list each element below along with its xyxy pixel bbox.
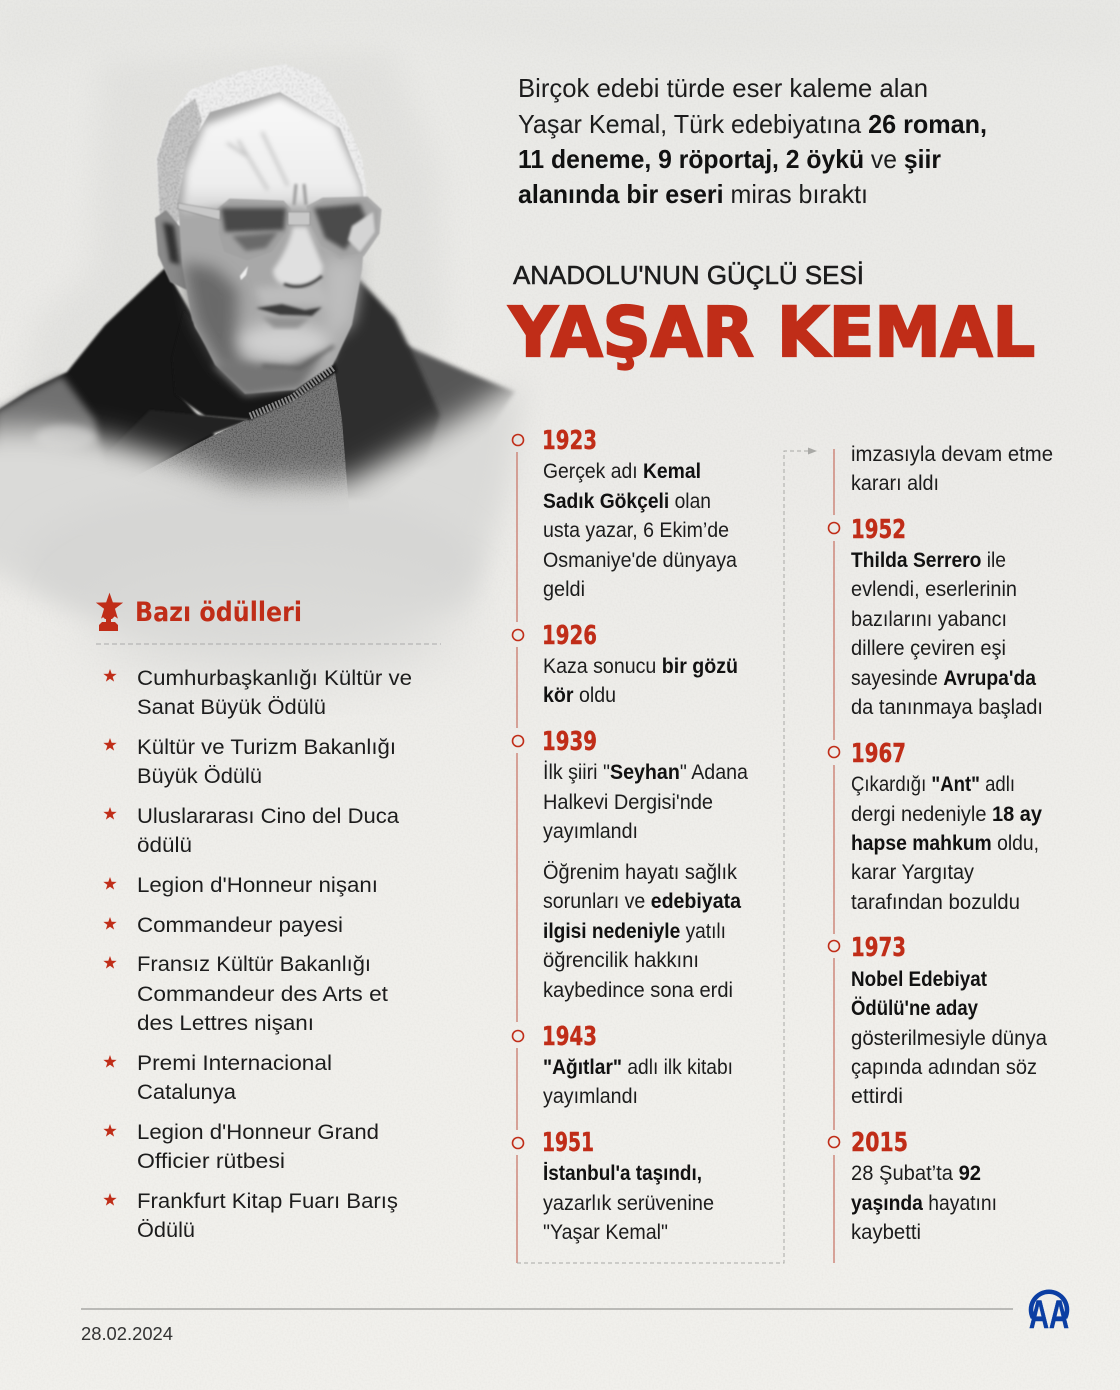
- 1926: Kaza sonucu bir gözü: [543, 655, 738, 678]
- awards list: Sanat Büyük Ödülü: [137, 696, 326, 719]
- 1943: 1943: [542, 1022, 597, 1052]
- awards list: Kültür ve Turizm Bakanlığı: [137, 736, 396, 759]
- 1967: dergi nedeniyle 18 ay: [851, 803, 1042, 826]
- 1951 continued: kararı aldı: [851, 472, 939, 495]
- tear highlight: [240, 266, 248, 280]
- right coat lapel: [320, 278, 440, 500]
- logo: Anadolu Agency: [1029, 1292, 1069, 1337]
- 1939: Öğrenim hayatı sağlık: [543, 861, 737, 884]
- 1951: 1951: [542, 1128, 594, 1158]
- mouth: [256, 304, 322, 316]
- 1943: [512, 1022, 733, 1108]
- hair: [156, 64, 368, 232]
- 1923: Osmaniye'de dünyaya: [543, 549, 737, 572]
- intro text: Birçok edebi türde eser kaleme alan: [518, 73, 928, 103]
- panel: awards: [96, 593, 441, 1242]
- 1939: Halkevi Dergisi'nde: [543, 791, 713, 814]
- awards list: [137, 667, 412, 1242]
- jaw crease: [262, 346, 334, 368]
- brow crease: [294, 184, 306, 205]
- awards list: ödülü: [137, 834, 192, 857]
- awards list: Legion d'Honneur nişanı: [137, 874, 378, 897]
- 1939: 1939: [542, 727, 597, 757]
- awards list: Legion d'Honneur Grand: [137, 1121, 379, 1144]
- 1939: sorunları ve edebiyata: [543, 890, 741, 913]
- forehead: [182, 96, 364, 214]
- awards list: Ödülü: [137, 1219, 195, 1242]
- ear: [155, 210, 187, 290]
- upper lip: [257, 284, 323, 306]
- awards list: Uluslararası Cino del Duca: [137, 805, 399, 828]
- 1952: 1952: [851, 515, 906, 545]
- intro text: 11 deneme, 9 röportaj, 2 öykü ve şiir: [518, 144, 941, 174]
- 1951: [512, 1128, 714, 1244]
- sweater: [148, 372, 348, 503]
- glasses temple and bridge: [178, 203, 310, 225]
- 1926: 1926: [542, 621, 597, 651]
- awards list: Fransız Kültür Bakanlığı: [137, 953, 371, 976]
- awards list: Büyük Ödülü: [137, 765, 262, 788]
- intro text: alanında bir eseri miras bıraktı: [518, 179, 868, 209]
- 1951: yazarlık serüvenine: [543, 1192, 714, 1215]
- awards heading: Bazı ödülleri: [135, 597, 302, 628]
- left cheek shadow: [182, 262, 250, 390]
- 1973: çapında adından söz: [851, 1056, 1037, 1079]
- awards list: Commandeur des Arts et: [137, 983, 388, 1006]
- 1967: hapse mahkum oldu,: [851, 832, 1039, 855]
- timeline column 1: [512, 426, 748, 1244]
- 1943: "Ağıtlar" adlı ilk kitabı: [543, 1056, 733, 1079]
- logo: Anadolu Agency: AA: [1029, 1293, 1069, 1337]
- 1973: ettirdi: [851, 1085, 903, 1108]
- 1939: [512, 727, 748, 1002]
- 1951 continued: [851, 443, 1053, 495]
- awards list: Premi Internacional: [137, 1052, 332, 1075]
- awards list: Commandeur payesi: [137, 914, 343, 937]
- awards list: Officier rütbesi: [137, 1150, 285, 1173]
- right shoulder of coat: [406, 344, 516, 458]
- 1967: [828, 739, 1042, 914]
- 1923: 1923: [542, 426, 597, 456]
- 2015: 2015: [851, 1128, 908, 1158]
- icon: trophy star: [96, 593, 123, 631]
- head: [155, 64, 380, 396]
- intro text: Yaşar Kemal, Türk edebiyatına 26 roman,: [518, 109, 987, 139]
- 1952: evlendi, eserlerinin: [851, 578, 1017, 601]
- right cheek: [322, 258, 362, 340]
- 1967: karar Yargıtay: [851, 861, 974, 884]
- left shoulder highlights: [0, 372, 102, 456]
- 1973: [828, 933, 1047, 1108]
- 1952: bazılarını yabancı: [851, 608, 1007, 631]
- 1952: Thilda Serrero ile: [851, 549, 1006, 572]
- 1943: yayımlandı: [543, 1085, 638, 1108]
- 1923: geldi: [543, 578, 585, 601]
- 1952: dillere çeviren eşi: [851, 637, 1006, 660]
- 1973: Ödülü'ne aday: [851, 997, 978, 1020]
- 2015: kaybetti: [851, 1221, 921, 1244]
- 1973: gösterilmesiyle dünya: [851, 1027, 1047, 1050]
- 1926: [512, 621, 738, 707]
- 1939: öğrencilik hakkını: [543, 949, 699, 972]
- footer rule: [81, 1308, 1013, 1310]
- 1951: İstanbul'a taşındı,: [543, 1162, 702, 1185]
- 1923: Gerçek adı Kemal: [543, 460, 701, 483]
- face: [178, 92, 366, 394]
- subtitle: ANADOLU'NUN GÜÇLÜ SESİ: [513, 260, 864, 290]
- timeline column 2: [828, 443, 1053, 1244]
- lower coat: [124, 410, 248, 452]
- forehead wrinkles: [227, 132, 288, 190]
- 1967: 1967: [851, 739, 906, 769]
- 1952: sayesinde Avrupa'da: [851, 667, 1036, 690]
- fog cloud below portrait: [0, 385, 525, 675]
- 1923: [512, 426, 737, 601]
- award stars: [103, 669, 117, 1206]
- nose: [273, 227, 323, 285]
- date: 28.02.2024: [81, 1324, 173, 1344]
- awards list: Catalunya: [137, 1081, 236, 1104]
- right lens: [308, 198, 380, 258]
- left coat: [0, 268, 215, 490]
- 2015: yaşında hayatını: [851, 1192, 997, 1215]
- left lens: [218, 198, 290, 210]
- 1952: da tanınmaya başladı: [851, 696, 1043, 719]
- divider: [96, 643, 441, 645]
- chin: [239, 323, 331, 361]
- awards list: Frankfurt Kitap Fuarı Barış: [137, 1190, 398, 1213]
- 1951 continued: imzasıyla devam etme: [851, 443, 1053, 466]
- awards list: Cumhurbaşkanlığı Kültür ve: [137, 667, 412, 690]
- neck shadow: [213, 352, 325, 396]
- 1952: [828, 515, 1043, 719]
- 1939: yayımlandı: [543, 820, 638, 843]
- 2015: [828, 1128, 997, 1244]
- 1939: İlk şiiri "Seyhan" Adana: [543, 761, 748, 784]
- 2015: 28 Şubat’ta 92: [851, 1162, 981, 1185]
- 1926: kör oldu: [543, 684, 616, 707]
- awards list: des Lettres nişanı: [137, 1012, 314, 1035]
- 1939: kaybedince sona erdi: [543, 979, 733, 1002]
- ribbed collar edge: [250, 368, 333, 416]
- 1951: "Yaşar Kemal": [543, 1221, 668, 1244]
- 1939: ilgisi nedeniyle yatılı: [543, 920, 726, 943]
- intro text: [518, 73, 987, 209]
- lower lip: [262, 317, 310, 328]
- timeline connector lines: [517, 448, 834, 1263]
- 1967: tarafından bozuldu: [851, 891, 1020, 914]
- turtleneck collar: [178, 324, 338, 422]
- 1923: Sadık Gökçeli olan: [543, 490, 711, 513]
- 1973: 1973: [851, 933, 906, 963]
- 1923: usta yazar, 6 Ekim’de: [543, 519, 729, 542]
- 1973: Nobel Edebiyat: [851, 968, 987, 991]
- 1967: Çıkardığı "Ant" adlı: [851, 773, 1015, 796]
- portrait photo of Yaşar Kemal: [0, 64, 515, 520]
- title: YAŞAR KEMAL: [508, 293, 1035, 373]
